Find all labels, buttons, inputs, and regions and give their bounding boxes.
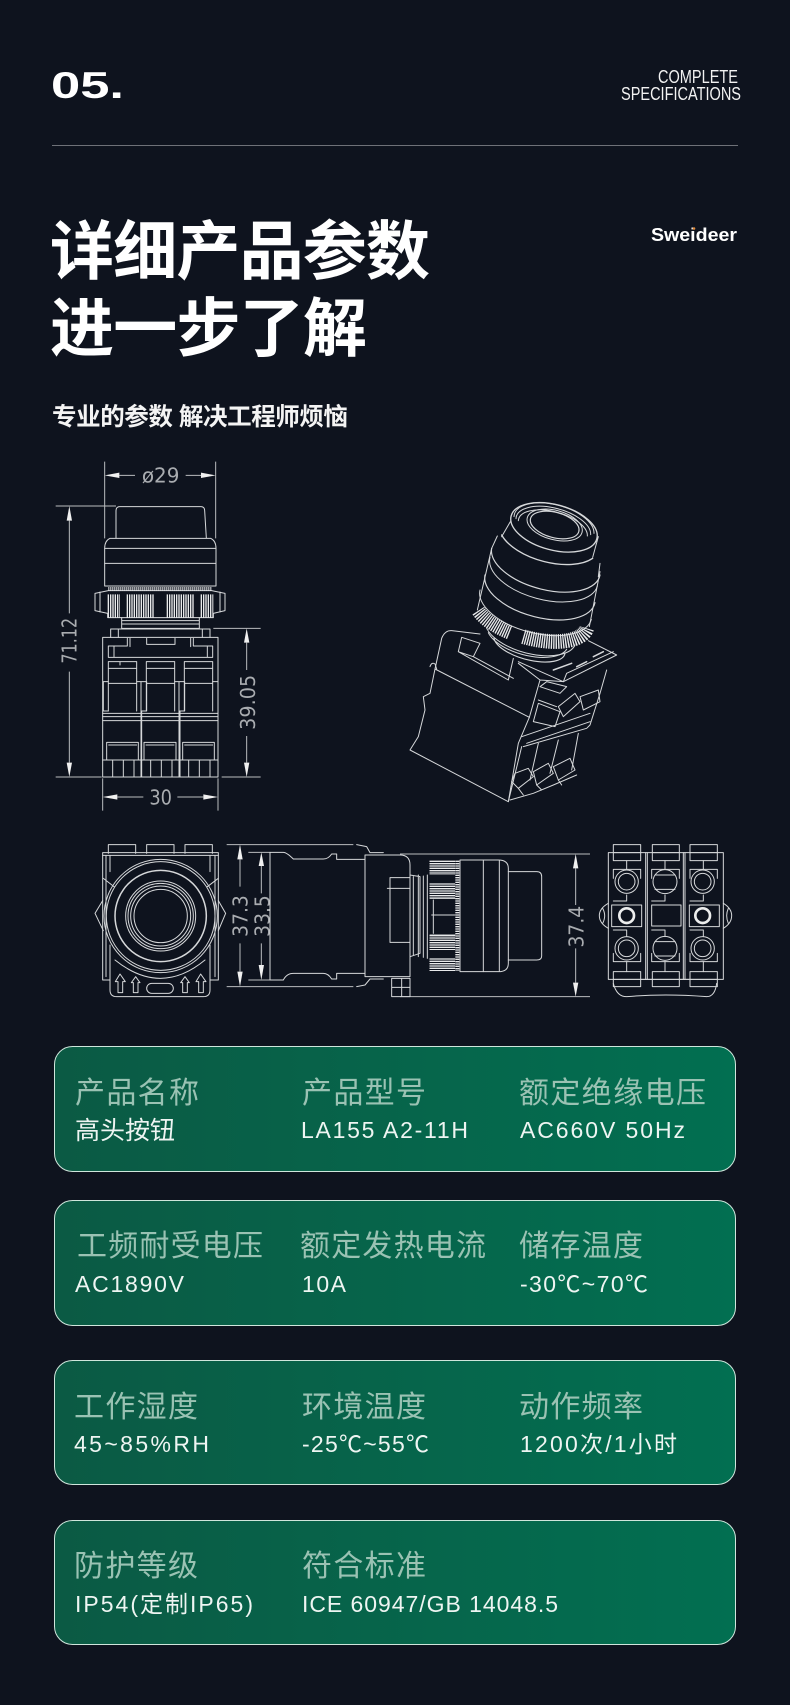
- spec: standards: [302, 1550, 558, 1617]
- spec: protection class: [74, 1550, 253, 1617]
- dimension arrows: [237, 845, 578, 997]
- dimension labels: ø29: [142, 464, 179, 488]
- spec: model: [301, 1077, 468, 1143]
- english heading: COMPLETE: [658, 67, 738, 87]
- spec: standards: 符合标准: [302, 1550, 426, 1583]
- button head: [477, 494, 603, 662]
- button body: [95, 507, 225, 777]
- spec: protection class: 防护等级: [74, 1550, 198, 1583]
- knurled ring: [478, 611, 587, 642]
- drawing: front view with dimensions: [56, 462, 261, 811]
- knurled ring: [108, 589, 213, 606]
- spec: model: 产品型号: [302, 1077, 426, 1110]
- drawing: terminal side view: [599, 845, 732, 997]
- drawing: isometric view: [410, 494, 617, 802]
- title: 详细产品参数: [50, 216, 430, 288]
- spec card 1: [54, 1046, 736, 1172]
- section number: 05.: [51, 65, 124, 106]
- spec: standards: ICE 60947/GB 14048.5: [302, 1591, 558, 1617]
- terminal body: [410, 631, 617, 802]
- spec: protection class: IP54(定制IP65): [75, 1591, 253, 1617]
- subtitle: 专业的参数 解决工程师烦恼: [52, 402, 348, 431]
- spec: rated insulation voltage: 额定绝缘电压: [519, 1077, 706, 1110]
- dimension labels: 71.12: [58, 618, 82, 663]
- dimension labels: 37.4: [564, 906, 588, 947]
- spec: power frequency withstand voltage: AC1890V: [75, 1271, 185, 1297]
- spec: rated insulation voltage: AC660V 50Hz: [520, 1117, 685, 1143]
- spec: storage temperature: 储存温度: [519, 1230, 643, 1263]
- dimension arrows: [67, 473, 249, 800]
- spec: ambient temperature: [302, 1391, 429, 1457]
- spec card 2: [54, 1200, 736, 1326]
- spec: power frequency withstand voltage: 工频耐受电压: [77, 1230, 263, 1263]
- side body: [270, 845, 542, 997]
- spec: storage temperature: -30℃~70℃: [520, 1271, 648, 1297]
- spec: rated insulation voltage: [519, 1077, 706, 1143]
- spec: working humidity: [74, 1391, 209, 1457]
- drawing: front face view: [95, 845, 226, 997]
- spec: operating frequency: 动作频率: [519, 1391, 643, 1424]
- spec: ambient temperature: -25℃~55℃: [302, 1431, 429, 1457]
- spec: rated thermal current: 10A: [302, 1271, 347, 1297]
- dimension lines: [227, 845, 590, 997]
- spec card 3: [54, 1360, 736, 1484]
- dimension labels: [58, 464, 260, 809]
- brand logo: Sweideer: [651, 225, 737, 245]
- knurl strip: [451, 861, 463, 971]
- title: [50, 216, 430, 365]
- dimension labels: 37.3: [228, 895, 252, 937]
- dimension labels: 30: [149, 785, 172, 809]
- spec: product name: 产品名称: [75, 1077, 199, 1110]
- knurled ring: [404, 861, 481, 971]
- dimension labels: 33.5: [250, 895, 274, 937]
- spec: storage temperature: [519, 1230, 648, 1297]
- english heading: SPECIFICATIONS: [621, 84, 741, 104]
- spec: rated thermal current: [300, 1230, 486, 1297]
- dimension labels: 39.05: [236, 675, 260, 730]
- spec: working humidity: 45~85%RH: [74, 1431, 209, 1457]
- spec: operating frequency: [519, 1391, 677, 1457]
- spec: operating frequency: 1200次/1小时: [520, 1431, 677, 1457]
- title: 进一步了解: [50, 293, 367, 365]
- drawing: side view with dimensions: [227, 845, 590, 997]
- english heading: [621, 67, 741, 104]
- spec: power frequency withstand voltage: [75, 1230, 263, 1297]
- dimension labels: [228, 895, 588, 947]
- spec: product name: [75, 1077, 199, 1145]
- spec: working humidity: 工作湿度: [74, 1391, 198, 1424]
- spec: product name: 高头按钮: [75, 1117, 175, 1145]
- dimension lines: [56, 462, 261, 811]
- spec: model: LA155 A2-11H: [301, 1117, 468, 1143]
- spec card 4: [54, 1520, 736, 1644]
- spec: rated thermal current: 额定发热电流: [300, 1230, 486, 1263]
- spec: ambient temperature: 环境温度: [302, 1391, 426, 1424]
